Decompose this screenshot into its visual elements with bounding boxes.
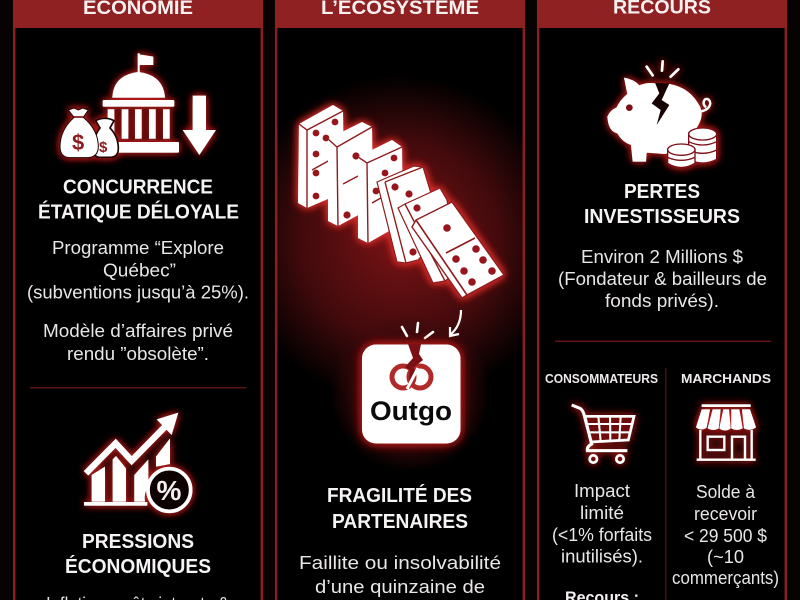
domino 3 [358,140,403,243]
text: impact [552,481,652,566]
icon: capitol, money bags and down arrow [60,53,216,158]
icon: storefront [696,404,756,460]
icon label: dollar big: $ [72,130,84,155]
heading: concurrence: CONCURRENCE [63,176,213,198]
label: marchands: MARCHANDS [681,371,771,386]
text: modèle: Modèle d’affaires privé [43,321,233,341]
heading: fragilité: PARTENAIRES [332,511,468,533]
domino 1 [298,105,344,208]
text: programme: Québec” [103,260,176,280]
panel: recours [537,0,787,600]
heading: fragilité [327,484,472,533]
text: faillite: d’une quinzaine de [315,577,485,597]
text: solde: commerçants) [672,568,779,588]
label: consommateurs: CONSOMMATEURS [545,371,658,386]
heading: pertes: INVESTISSEURS [584,206,740,228]
icon: chart and percent [84,413,191,511]
text: faillite: Faillite ou insolvabilité [299,553,501,573]
text: solde [672,482,779,588]
text: solde: (~10 [707,547,744,567]
text: solde: Solde à [696,482,756,502]
heading: concurrence [38,176,239,224]
heading: pertes [584,181,740,228]
text: solde: recevoir [694,504,757,524]
panel: économie [13,0,263,600]
domino 5 [398,188,460,283]
text: impact: (<1% forfaits [552,525,652,545]
text: impact: Impact [574,481,630,501]
text: impact: inutilisés). [561,546,643,566]
icon: falling dominoes [298,105,504,298]
icon: broken piggy bank [607,61,717,167]
text: programme: Programme “Explore [52,238,224,258]
column: marchands [672,371,779,588]
heading: concurrence: ÉTATIQUE DÉLOYALE [38,200,239,224]
heading: pressions [65,531,211,578]
logo: outgo: Outgo [370,396,452,426]
icon: sparks over logo [402,323,433,338]
domino 2 [328,122,373,226]
heading: pressions: ÉCONOMIQUES [65,555,211,578]
domino 4 [377,166,443,263]
text: solde: < 29 500 $ [684,526,767,546]
icon: shopping cart [572,405,634,463]
text: environ [558,247,767,311]
heading: pressions: PRESSIONS [82,531,194,553]
heading: pertes: PERTES [624,181,700,203]
text: environ: Environ 2 Millions $ [581,247,743,267]
text: programme: (subventions jusqu’à 25%). [27,282,249,302]
text: modèle: rendu ”obsolète”. [67,344,209,364]
text: impact: limité [580,503,624,523]
text: environ: fonds privés). [605,291,719,311]
panel: écosystème [275,0,525,600]
text: programme [27,238,249,302]
heading: fragilité: FRAGILITÉ DES [327,484,472,507]
text: environ: (Fondateur & bailleurs de [558,269,767,289]
text: faillite [299,553,501,597]
logo: outgo [362,344,460,444]
icon label: dollar small: $ [99,139,108,156]
column: consommateurs [545,371,658,600]
icon label: percent: % [156,475,182,506]
domino 6 [412,202,504,298]
arrow: dominoes to logo [450,310,461,336]
text: modèle [43,321,233,364]
